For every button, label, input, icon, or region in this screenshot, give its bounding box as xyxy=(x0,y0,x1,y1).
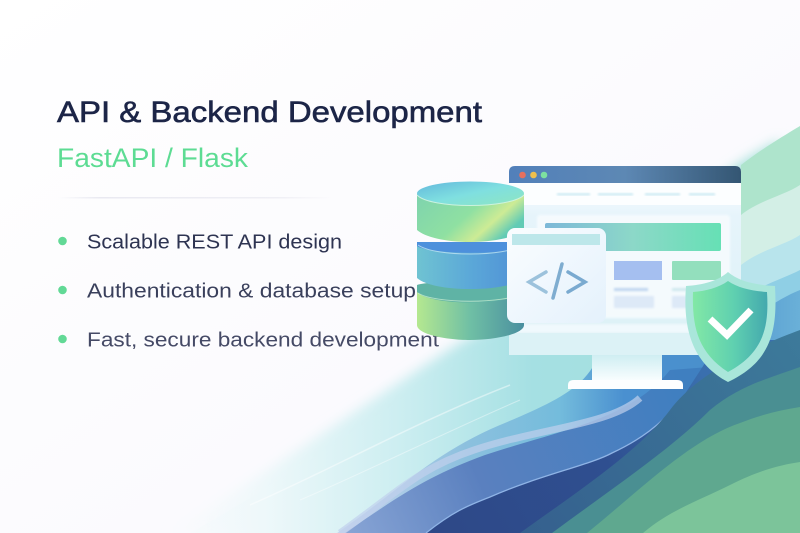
security shield icon xyxy=(685,272,775,382)
check mark xyxy=(710,310,751,335)
code window card xyxy=(507,228,606,323)
bullet: fast secure: Fast, secure backend development xyxy=(87,328,439,352)
browser title bar xyxy=(509,166,741,183)
monitor illustration xyxy=(417,166,775,389)
bullet: REST API: Scalable REST API design xyxy=(87,230,342,254)
monitor screen xyxy=(509,170,741,355)
title: API & Backend Development xyxy=(57,96,482,129)
bottom disk xyxy=(417,281,524,340)
bullet list xyxy=(58,230,439,352)
subtitle: FastAPI / Flask xyxy=(57,143,249,173)
blue content block xyxy=(614,261,662,280)
green content block xyxy=(672,261,721,280)
wave background xyxy=(170,126,800,533)
middle disk xyxy=(417,242,524,289)
top disk xyxy=(417,182,524,242)
database stack icon xyxy=(417,182,524,340)
bullet: authentication: Authentication & database setup xyxy=(87,280,416,302)
code symbol xyxy=(529,264,585,298)
content lines xyxy=(614,288,692,308)
page panel xyxy=(537,215,730,318)
hero banner xyxy=(545,223,721,251)
monitor chin xyxy=(509,324,741,355)
navigation bar xyxy=(509,183,741,205)
monitor stand xyxy=(568,355,683,389)
